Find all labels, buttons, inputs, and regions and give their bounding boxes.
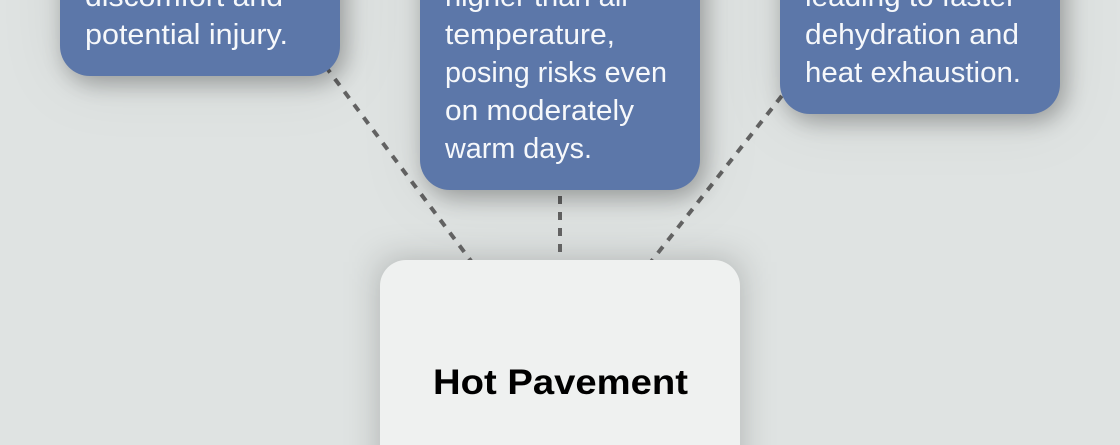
panel: hot pavement central node: [380, 260, 740, 445]
heading: hot pavement: Hot Pavement: [433, 363, 688, 402]
panel: center effect card: on moderately: [445, 95, 635, 127]
panel: center effect card: temperature,: [445, 19, 615, 51]
panel: right effect card: dehydration and: [805, 19, 1019, 51]
connectors to hot pavement: [325, 66, 782, 263]
panel: left effect card: potential injury.: [85, 19, 288, 51]
panel: center effect card: [420, 0, 700, 190]
hot pavement node shadow: [380, 260, 740, 445]
panel: right effect card: [780, 0, 1060, 114]
panel: left effect card: [60, 0, 340, 76]
panel: center effect card: posing risks even: [445, 57, 667, 89]
panel: right effect card: heat exhaustion.: [805, 57, 1021, 89]
panel: center effect card: warm days.: [444, 133, 592, 165]
